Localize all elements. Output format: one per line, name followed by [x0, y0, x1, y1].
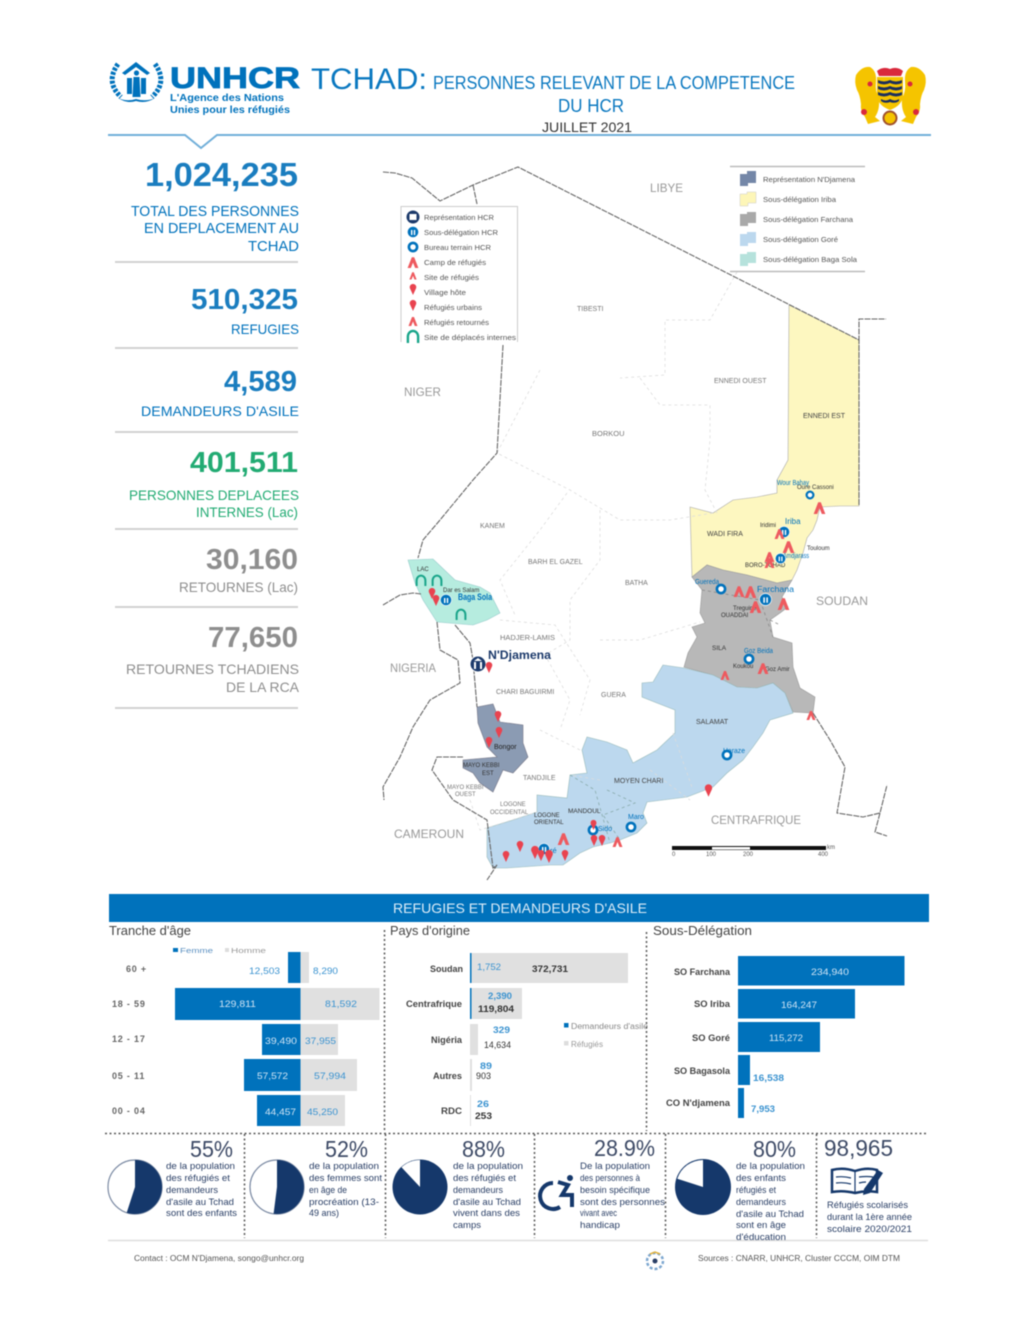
legend: sub-delegations: Sous-délégation Farchana: [763, 215, 854, 224]
region labels: TANDJILE: [523, 775, 556, 782]
city labels: Baga Sola: [458, 592, 493, 602]
stat: children 55%: des réfugiés et: [166, 1173, 230, 1184]
title: JUILLET 2021: [542, 119, 632, 135]
chart: sub-delegations: [653, 923, 904, 1118]
region labels: Oure Cassoni: [797, 485, 834, 491]
stat: total: TCHAD: [248, 239, 299, 255]
scale bar: [672, 845, 835, 858]
stat: total: EN DEPLACEMENT AU: [144, 221, 299, 237]
title: PERSONNES RELEVANT DE LA COMPETENCE: [433, 73, 795, 93]
labels: SO Iriba: [694, 999, 731, 1010]
city labels: [458, 480, 809, 855]
value labels: 26: [477, 1099, 489, 1110]
labels: [666, 967, 731, 1109]
chart legend: Demandeurs d'asile: [571, 1022, 649, 1031]
values: 164,247: [781, 1000, 817, 1011]
international borders: [383, 167, 887, 880]
stat: refugees: [191, 284, 299, 337]
icon: coat of arms of Chad: [855, 67, 926, 124]
scale bar: 200: [743, 852, 754, 858]
country labels: [406, 964, 463, 1116]
stat: returnees Lac: RETOURNES (Lac): [179, 579, 298, 595]
chart legend: [564, 1022, 649, 1049]
region labels: ENNEDI EST: [803, 413, 846, 420]
value labels: 329: [493, 1025, 510, 1036]
region labels: LAC: [417, 567, 429, 573]
value labels: 57,572: [257, 1071, 288, 1082]
value labels: 2,390: [488, 991, 512, 1002]
value labels: 39,490: [265, 1036, 297, 1047]
region labels: Dar es Salam: [443, 588, 479, 594]
region labels: TIBESTI: [577, 306, 604, 313]
contact: Contact : OCM N'Djamena, songo@unhcr.org: [134, 1253, 304, 1263]
legend labels: Site de réfugiés: [424, 273, 479, 282]
stat: disability 28.9%: des personnes à: [580, 1173, 641, 1184]
bars: [175, 952, 380, 1126]
stat: children 55%: [108, 1136, 237, 1219]
stat: education 80%: réfugiés et: [736, 1185, 776, 1196]
region labels: SILA: [712, 645, 727, 652]
stat: returnees RCA: [126, 622, 300, 695]
stat: refugees: REFUGIES: [231, 321, 299, 337]
labels: SO Bagasola: [674, 1066, 731, 1077]
icon: UNHCR emblem: [112, 62, 161, 102]
region: Goré (light blue): [487, 665, 793, 868]
region labels: ORIENTAL: [534, 820, 564, 826]
chart legend: Réfugiés: [571, 1040, 603, 1049]
chart heading: Tranche d'âge: [109, 923, 191, 938]
region labels: MAYO KEBBI: [463, 763, 500, 769]
stat: internally displaced: INTERNES (Lac): [196, 504, 298, 520]
region labels: Treguine: [733, 606, 757, 612]
header: UNHCR logo: [112, 62, 300, 116]
stat: disability 28.9%: 28.9%: [594, 1135, 655, 1161]
city labels: Sido: [598, 826, 612, 833]
age labels: [112, 964, 147, 1116]
value labels: 12,503: [249, 966, 280, 977]
stat: camps 88%: 88%: [462, 1136, 505, 1162]
icon: representation: [406, 210, 420, 224]
stat: camps 88%: camps: [453, 1220, 481, 1231]
stat: women 52%: des femmes sont: [309, 1173, 382, 1184]
pie chart: [108, 1160, 162, 1214]
country labels: LIBYE: [650, 181, 683, 195]
region labels: [417, 306, 846, 826]
region labels: Touloum: [807, 546, 830, 552]
stat: children 55%: demandeurs: [166, 1185, 218, 1196]
region labels: GUERA: [601, 692, 626, 699]
region labels: LOGONE: [534, 813, 560, 819]
region labels: SALAMAT: [696, 719, 729, 726]
icon: wheelchair: [540, 1175, 573, 1209]
value labels: 8,290: [313, 966, 338, 977]
legend labels: Site de déplacés internes: [424, 333, 516, 342]
administrative boundaries: [470, 272, 780, 843]
country labels: NIGERIA: [390, 661, 436, 675]
region: Iriba (yellow): [690, 305, 859, 583]
values: 16,538: [753, 1073, 784, 1084]
stat: returnees RCA: 77,650: [208, 622, 298, 654]
labels: SO Goré: [692, 1033, 730, 1044]
Mongo-area site label: Bongor: [494, 744, 517, 751]
panel: key figures: [115, 156, 300, 708]
region labels: BORKOU: [592, 429, 625, 438]
city labels: Guereda: [695, 579, 719, 586]
map of Chad: [383, 167, 887, 880]
region labels: HADJER-LAMIS: [500, 633, 555, 642]
UNHCR wordmark: UNHCR: [170, 62, 300, 95]
row separators: [105, 1134, 928, 1240]
region: Mayo-Kebbi / Tandjilé (slate): [463, 704, 528, 792]
country labels: SOUDAN: [816, 594, 868, 608]
region labels: MOYEN CHARI: [614, 778, 663, 785]
age labels: 05 - 11: [112, 1071, 145, 1081]
chart heading: Pays d'origine: [390, 923, 470, 938]
chart legend: Femme: [180, 946, 213, 955]
stat: asylum seekers: [141, 366, 299, 419]
stat: education 80%: [675, 1136, 805, 1243]
country labels: CAMEROUN: [394, 827, 464, 841]
title: DU HCR: [558, 96, 624, 116]
value labels: 1,752: [477, 962, 501, 973]
region labels: ENNEDI OUEST: [714, 378, 767, 385]
value labels: [475, 962, 569, 1122]
stat: total: 1,024,235: [145, 156, 298, 193]
stat: returnees RCA: DE LA RCA: [226, 679, 300, 695]
legend: sub-delegations: Sous-délégation Baga Sola: [763, 255, 858, 264]
city labels: Maro: [628, 814, 644, 821]
title: [311, 63, 795, 135]
stat: disability 28.9%: besoin spécifique: [580, 1185, 650, 1196]
region labels: Iridimi: [760, 523, 776, 529]
values: 7,953: [751, 1104, 775, 1115]
legend: map symbols: [400, 206, 518, 343]
stat: children 55%: sont des enfants: [166, 1208, 237, 1219]
region labels: WADI FIRA: [707, 531, 743, 538]
value labels: 57,994: [314, 1071, 346, 1082]
stat: women 52%: 52%: [325, 1136, 368, 1162]
stat: women 52%: procréation (13-: [309, 1197, 379, 1208]
stat: women 52%: [250, 1136, 382, 1219]
region labels: MANDOUL: [568, 808, 601, 815]
region labels: OCCIDENTAL: [490, 810, 529, 816]
stat: schooling 98,965: 98,965: [824, 1135, 893, 1161]
legend labels: Camp de réfugiés: [424, 258, 486, 267]
legend labels: Sous-délégation HCR: [424, 228, 499, 237]
stat: camps 88%: vivent dans des: [453, 1208, 520, 1219]
stat: internally displaced: PERSONNES DEPLACEES: [129, 487, 299, 503]
value labels: 37,955: [305, 1036, 336, 1047]
icon: N'Djamena representation: [470, 656, 486, 672]
value labels: 903: [476, 1071, 491, 1082]
N'Djamena label: N'Djamena: [488, 648, 551, 662]
region labels: Goz Amir: [765, 667, 790, 673]
stat: education 80%: demandeurs: [736, 1197, 786, 1208]
country labels: NIGER: [404, 385, 441, 399]
stat: schooling 98,965: scolaire 2020/2021: [827, 1224, 912, 1235]
pie chart: [392, 1160, 448, 1214]
stat: asylum seekers: 4,589: [224, 366, 297, 398]
chart: country of origin: [390, 923, 649, 1126]
stat: camps 88%: [392, 1136, 523, 1231]
icon: OCM footer logo: [647, 1252, 663, 1269]
stat: total: [131, 156, 299, 255]
bars: [470, 953, 628, 1126]
legend labels: Village hôte: [424, 288, 466, 297]
region labels: LOGONE: [500, 802, 526, 808]
stat: women 52%: en âge de: [309, 1185, 347, 1196]
country labels: CENTRAFRIQUE: [711, 813, 801, 827]
region labels: OUADDAI: [721, 613, 749, 619]
stat: children 55%: d'asile au Tchad: [166, 1197, 234, 1208]
pie chart: [675, 1159, 731, 1215]
values: 234,940: [811, 967, 849, 978]
stat: internally displaced: [129, 447, 299, 520]
title: TCHAD:: [311, 63, 427, 96]
stat: disability 28.9%: vivant avec: [580, 1208, 617, 1219]
region labels: BORO-TCHAD: [745, 563, 786, 569]
city labels: Farchana: [757, 584, 794, 594]
legend: sub-delegations: Représentation N'Djamena: [763, 175, 856, 184]
country labels: Nigéria: [431, 1035, 463, 1045]
values: 115,272: [769, 1033, 803, 1044]
logo tagline: [170, 93, 290, 116]
value labels: 14,634: [484, 1040, 511, 1051]
city labels: Haraze: [723, 748, 745, 755]
stat: camps 88%: de la population: [453, 1161, 523, 1172]
stat: camps 88%: des réfugiés et: [453, 1173, 516, 1184]
city labels: Amdjarass: [783, 553, 809, 560]
chart: age groups: [109, 923, 380, 1126]
chart legend: [173, 946, 266, 955]
stat: schooling 98,965: Réfugiés scolarisés: [827, 1200, 908, 1211]
labels: CO N'djamena: [666, 1098, 731, 1109]
region labels: BATHA: [625, 580, 648, 587]
section banner: [109, 894, 929, 922]
stat: camps 88%: demandeurs: [453, 1185, 503, 1196]
stat: refugees: 510,325: [191, 284, 298, 316]
stat: education 80%: des enfants: [736, 1173, 786, 1184]
map markers: [416, 492, 825, 863]
chart legend: Homme: [231, 946, 266, 955]
legend labels: Réfugiés urbains: [424, 303, 482, 312]
section banner: REFUGIES ET DEMANDEURS D'ASILE: [393, 900, 647, 916]
value labels: 89: [480, 1061, 492, 1072]
values: [751, 967, 849, 1115]
age labels: 60 +: [126, 964, 147, 974]
stat: disability 28.9%: De la population: [580, 1161, 650, 1172]
stat: women 52%: 49 ans): [309, 1208, 339, 1219]
value labels: 372,731: [532, 964, 569, 975]
labels: SO Farchana: [674, 967, 731, 978]
legend labels: Représentation HCR: [424, 213, 495, 222]
icon: open book and pen: [832, 1169, 883, 1195]
value labels: 44,457: [265, 1107, 296, 1118]
city labels: Goz Beida: [744, 648, 773, 655]
age labels: 18 - 59: [112, 999, 146, 1009]
city labels: Goré: [540, 846, 557, 855]
stat: total: TOTAL DES PERSONNES: [131, 204, 299, 220]
stat: women 52%: de la population: [309, 1161, 379, 1172]
country labels: [390, 181, 868, 841]
region: Farchana (grey): [684, 565, 815, 713]
region labels: MAYO KEBBI: [447, 785, 484, 791]
region labels: OUEST: [455, 792, 476, 798]
stat: disability 28.9%: handicap: [580, 1220, 620, 1231]
stat: disability 28.9%: [540, 1135, 665, 1231]
stat: education 80%: sont en âge: [736, 1220, 786, 1231]
country labels: Autres: [433, 1071, 462, 1081]
stat: education 80%: d'asile au Tchad: [736, 1209, 804, 1220]
region labels: CHARI BAGUIRMI: [496, 689, 554, 696]
region labels: EST: [482, 771, 494, 777]
stat: education 80%: 80%: [753, 1136, 796, 1162]
city labels: Iriba: [785, 517, 801, 526]
header rule with notch: [108, 135, 931, 148]
city labels: Wour Bahay: [777, 480, 809, 487]
age labels: 00 - 04: [112, 1106, 146, 1116]
stat: returnees RCA: RETOURNES TCHADIENS: [126, 661, 299, 677]
legend: sub-delegations: [730, 166, 865, 272]
stat: internally displaced: 401,511: [190, 447, 298, 479]
logo tagline: Unies pour les réfugiés: [170, 105, 290, 116]
stat: education 80%: de la population: [736, 1161, 805, 1172]
legend: sub-delegations: Sous-délégation Iriba: [763, 195, 837, 204]
scale bar: 0: [672, 852, 676, 858]
value labels: [219, 966, 357, 1118]
age labels: 12 - 17: [112, 1034, 146, 1044]
value labels: 119,804: [478, 1004, 515, 1015]
region labels: Koukou: [733, 664, 753, 670]
scale bar: km: [827, 845, 835, 851]
chart heading: Sous-Délégation: [653, 923, 752, 938]
stat: returnees Lac: 30,160: [206, 544, 298, 576]
stat: education 80%: d'éducation: [736, 1232, 786, 1243]
legend labels: Réfugiés retournés: [424, 318, 489, 327]
legend labels: Bureau terrain HCR: [424, 243, 492, 252]
legend labels: [424, 213, 516, 342]
value labels: 45,250: [307, 1107, 338, 1118]
stat: asylum seekers: DEMANDEURS D'ASILE: [141, 403, 299, 419]
stat: returnees Lac: [179, 544, 298, 595]
logo tagline: L'Agence des Nations: [170, 93, 284, 104]
region labels: BARH EL GAZEL: [528, 559, 583, 566]
sources: Sources : CNARR, UNHCR, Cluster CCCM, OIM DTM: [698, 1253, 900, 1263]
stat: camps 88%: d'asile au Tchad: [453, 1197, 521, 1208]
country labels: RDC: [441, 1106, 463, 1116]
pie chart: [250, 1160, 304, 1214]
country labels: Soudan: [430, 964, 463, 974]
region: Lac (teal): [408, 559, 500, 625]
stat: children 55%: de la population: [166, 1161, 235, 1172]
scale bar: 100: [706, 852, 717, 858]
stat: children 55%: 55%: [190, 1136, 233, 1162]
value labels: 129,811: [219, 999, 256, 1010]
stat: schooling 98,965: [824, 1135, 912, 1235]
stat: schooling 98,965: durant la 1ère année: [827, 1212, 912, 1223]
legend: sub-delegations: Sous-délégation Goré: [763, 235, 838, 244]
value labels: 81,592: [325, 999, 357, 1010]
scale bar: 400: [818, 852, 829, 858]
stat: disability 28.9%: sont des personnes: [580, 1197, 665, 1208]
region labels: KANEM: [480, 523, 505, 530]
bars: [738, 956, 904, 1118]
value labels: 253: [475, 1111, 492, 1122]
country labels: Centrafrique: [406, 999, 462, 1009]
